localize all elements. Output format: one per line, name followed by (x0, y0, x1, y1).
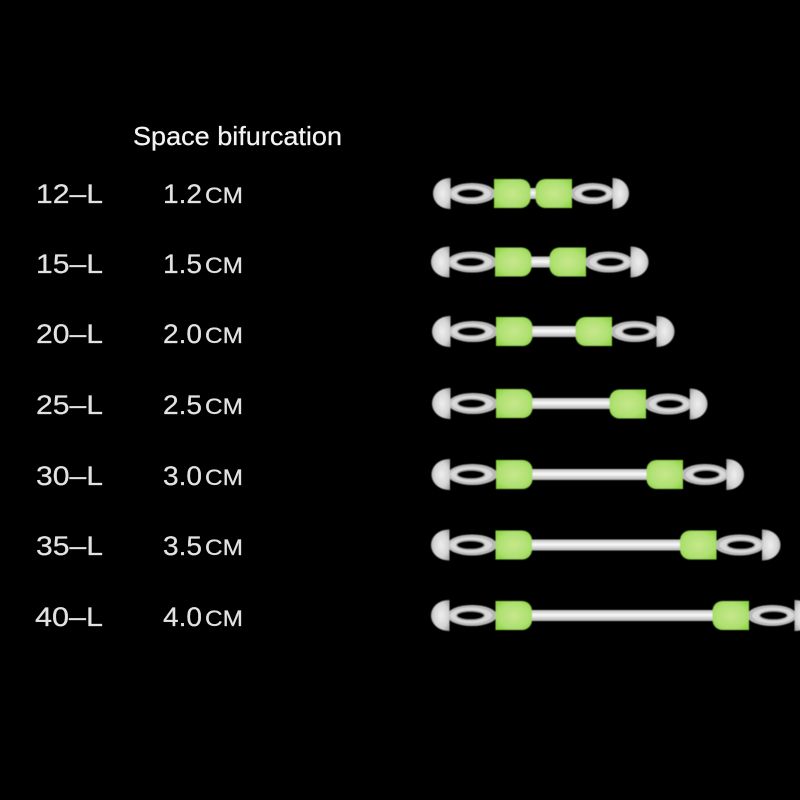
row: 35-L (36, 530, 780, 561)
spacing value: CM (205, 465, 243, 490)
model label: 35–L (36, 531, 103, 561)
product: 3.0 cm (432, 459, 744, 490)
spacing value (163, 461, 243, 491)
row: 20-L (36, 316, 674, 349)
row: 15-L (36, 246, 648, 279)
model label: 40–L (35, 602, 103, 632)
spacing value: 2.5 (163, 390, 202, 420)
product: 1.5 cm (431, 246, 648, 278)
spacing value: CM (205, 183, 243, 208)
row: 30-L (36, 459, 744, 491)
row: 25-L (36, 388, 708, 420)
heading: space bifurcation: Space bifurcation (133, 121, 342, 151)
spacing value: 1.5 (163, 249, 202, 279)
spacing value: 3.0 (163, 461, 202, 491)
spacing value: CM (205, 606, 243, 631)
product: 3.5 cm (431, 530, 780, 560)
spacing value: 1.2 (163, 179, 202, 209)
product: 2.5 cm (432, 388, 708, 420)
model label: 25–L (36, 390, 103, 420)
row: 12-L (36, 178, 629, 209)
model label: 15–L (36, 249, 103, 279)
spacing value (163, 249, 243, 279)
spacing value: 3.5 (163, 531, 202, 561)
product: 4.0 cm (431, 600, 800, 631)
spacing value: CM (205, 535, 243, 560)
model label: 20–L (36, 319, 103, 349)
model label: 30–L (36, 461, 103, 491)
spacing value (163, 602, 243, 632)
spacing value (163, 531, 243, 561)
spacing value: CM (205, 323, 243, 348)
spacing value: CM (205, 394, 243, 419)
row: 40-L (35, 600, 800, 632)
spacing value (163, 319, 243, 349)
product: 1.2 cm (433, 178, 629, 209)
product: 2.0 cm (432, 316, 674, 347)
model label: 12–L (36, 179, 103, 209)
spacing value: CM (205, 253, 243, 278)
spacing value: 4.0 (163, 602, 202, 632)
spacing value (163, 390, 243, 420)
spacing value (163, 179, 243, 209)
spacing value: 2.0 (163, 319, 202, 349)
